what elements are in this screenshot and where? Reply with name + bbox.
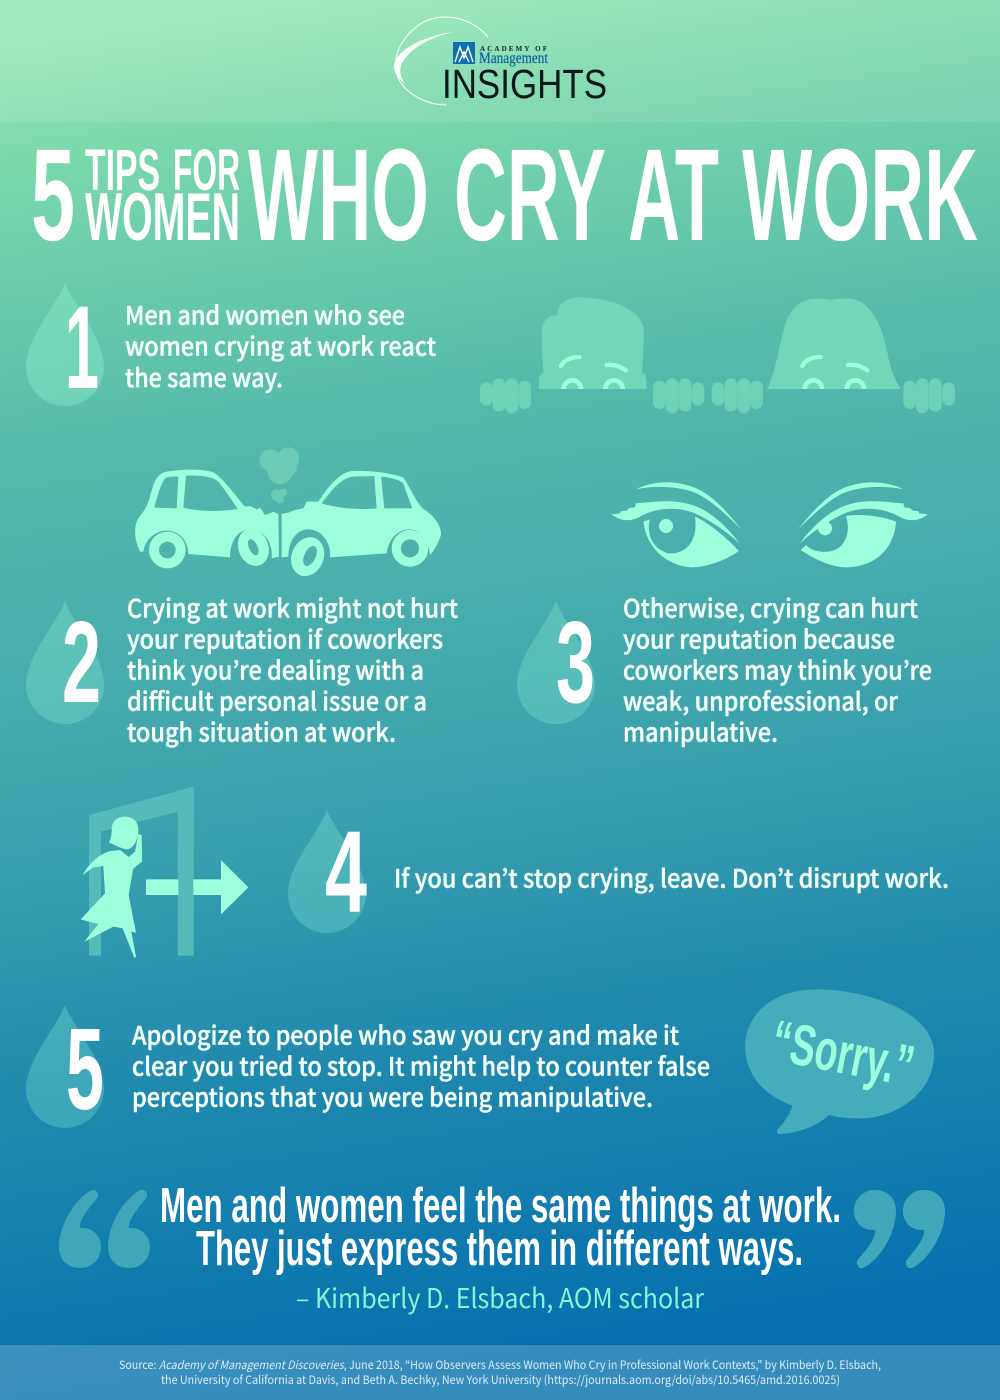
text 3: manipulative. bbox=[623, 714, 778, 750]
number 4: 4 bbox=[325, 807, 367, 937]
logo: Academy of Management Insights bbox=[394, 17, 607, 107]
quote marks open bbox=[59, 1190, 150, 1268]
drop 2 bbox=[26, 601, 104, 724]
text 3: coworkers may think you’re bbox=[623, 652, 932, 688]
title: CRY bbox=[454, 121, 606, 268]
tip 2 bbox=[26, 590, 458, 750]
text 2: tough situation at work. bbox=[127, 714, 396, 750]
text 3 bbox=[623, 590, 932, 750]
text 1: women crying at work react bbox=[125, 328, 436, 364]
logo: Academy of Management Insights: INSIGHTS bbox=[442, 61, 607, 107]
text 3: Otherwise, crying can hurt bbox=[623, 590, 918, 626]
icon: peeking faces bbox=[480, 297, 955, 413]
header band bbox=[0, 0, 1000, 122]
drop 5 bbox=[26, 1005, 104, 1128]
icon: woman leaving through door bbox=[81, 787, 248, 958]
title bbox=[31, 121, 978, 268]
speech bubble: Sorry: “Sorry.” bbox=[767, 1008, 919, 1099]
text 2 bbox=[127, 590, 458, 750]
tip 5 bbox=[26, 1004, 710, 1134]
title: WOMEN bbox=[85, 179, 240, 255]
tip 3 bbox=[517, 590, 932, 750]
number 5: 5 bbox=[66, 1004, 104, 1134]
number 2: 2 bbox=[62, 597, 101, 727]
text 2: difficult personal issue or a bbox=[127, 682, 427, 718]
title: FOR bbox=[173, 138, 240, 203]
title: WHO bbox=[248, 121, 429, 268]
drop 1 bbox=[26, 283, 104, 406]
quote marks close bbox=[854, 1190, 945, 1268]
text 1: Men and women who see bbox=[125, 296, 405, 332]
logo: Academy of Management Insights: ACADEMY OF bbox=[480, 45, 547, 53]
source text: the University of California at Davis, and Beth A. Bechky, New York University (https://journals.aom.org/doi/abs/10.5465/amd.2016.0025) bbox=[161, 1372, 840, 1388]
text 4: If you can’t stop crying, leave. Don’t disrupt work. bbox=[394, 860, 949, 896]
speech bubble: Sorry bbox=[745, 989, 934, 1134]
text 5: Apologize to people who saw you cry and make it bbox=[132, 1016, 679, 1052]
text 3: weak, unprofessional, or bbox=[623, 682, 899, 718]
text 3: your reputation because bbox=[623, 620, 895, 656]
quote bbox=[59, 1179, 945, 1316]
icon: eyes bbox=[612, 482, 928, 567]
text 1 bbox=[125, 296, 436, 395]
footer band bbox=[0, 1345, 1000, 1400]
text 1: the same way. bbox=[125, 359, 283, 395]
text 5: perceptions that you were being manipulative. bbox=[132, 1078, 653, 1114]
drop 3 bbox=[517, 601, 595, 724]
drop 4 bbox=[288, 810, 366, 933]
number 3: 3 bbox=[556, 597, 595, 727]
text 2: your reputation if coworkers bbox=[127, 620, 443, 656]
source text bbox=[119, 1357, 881, 1388]
tip 1 bbox=[26, 282, 436, 414]
text 2: think you’re dealing with a bbox=[127, 652, 424, 688]
tip 4 bbox=[288, 807, 949, 937]
source text: Source: Academy of Management Discoveries, June 2018, “How Observers Assess Women Who Cry in Professional Work Contexts,” by Kimberly D. Elsbach, bbox=[119, 1357, 881, 1373]
icon: car crash bbox=[135, 447, 441, 581]
number 1: 1 bbox=[65, 282, 99, 414]
text 5 bbox=[132, 1016, 710, 1114]
attribution: – Kimberly D. Elsbach, AOM scholar bbox=[296, 1277, 704, 1316]
title: TIPS bbox=[85, 138, 160, 203]
title: AT bbox=[628, 121, 719, 268]
title: 5 bbox=[31, 121, 75, 268]
logo: Academy of Management Insights: Management bbox=[479, 50, 548, 67]
text 2: Crying at work might not hurt bbox=[127, 590, 458, 626]
quote text bbox=[160, 1179, 841, 1276]
text 5: clear you tried to stop. It might help to counter false bbox=[132, 1048, 710, 1084]
